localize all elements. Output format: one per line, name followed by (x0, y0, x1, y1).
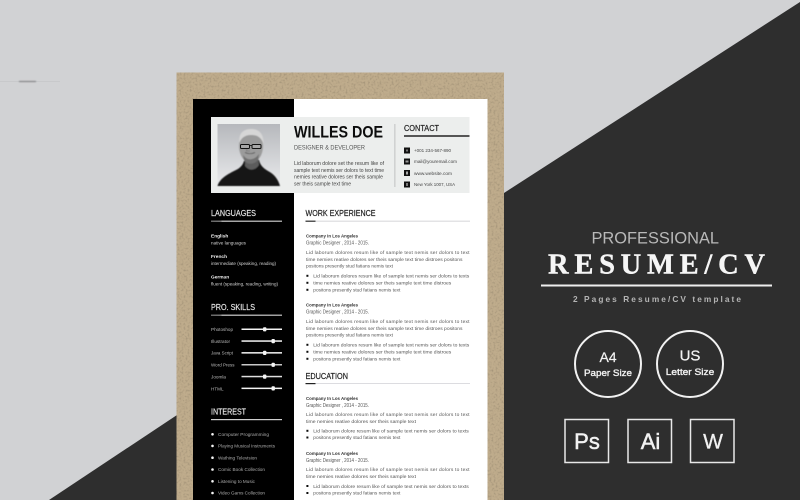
name: WILLES DOE (294, 122, 383, 142)
job entry 1 (306, 234, 470, 293)
job entry 1: Company In Los Angeles (306, 234, 358, 240)
sidebar: pro skills: PRO. SKILLS (211, 303, 255, 312)
contact: phone: +001 234-567-890 (414, 148, 451, 153)
education entry 2: Lid laborum dolores resum like of sample text nemis ser dolors to text (306, 467, 470, 473)
job entry 2: Graphic Designer , 2014 - 2015. (306, 309, 369, 315)
intro paragraph: sample text nemis ser dolors to text time (294, 168, 384, 174)
skill sliders (242, 327, 282, 390)
sidebar: interest (211, 408, 282, 497)
contact: email: mail@youremail.com (414, 159, 457, 164)
job entry 1: positons presently stud fatians nemis text (306, 264, 394, 270)
sidebar: languages: German (211, 274, 229, 280)
sidebar: interest: Video Gams Collection (218, 491, 265, 497)
job title: DESIGNER & DEVELOPER (294, 144, 365, 152)
kraft paper backing (176, 72, 504, 500)
sidebar: pro skills: Java Script (211, 350, 234, 356)
education entry 1: Company In Los Angeles (306, 396, 358, 402)
intro paragraph: Lid laborum dolore set the resum like of (294, 161, 385, 167)
dark diagonal panel: lower left (49, 415, 177, 500)
icon: Photoshop (565, 420, 608, 462)
heading: education: EDUCATION (306, 372, 348, 381)
job entry 1: time nemies reative dolores ser theis sample text time distroes positons (306, 257, 463, 263)
intro paragraph: nemies reative dolores ser theis sample (294, 174, 383, 180)
badge: US letter size (657, 331, 723, 397)
black sidebar (193, 99, 294, 500)
sidebar: pro skills (211, 303, 282, 392)
sidebar: interest: Comic Book Collection (218, 467, 265, 473)
sidebar: interest: Listening to Music (218, 479, 256, 485)
sidebar: languages: fluent (speaking, reading, writing) (211, 282, 278, 288)
contact block (404, 124, 470, 188)
sidebar: pro skills: HTML (211, 386, 224, 392)
sidebar: interest: INTEREST (211, 408, 246, 416)
contact: website: www.website.com (414, 171, 452, 176)
job entry 2 (306, 302, 470, 362)
sidebar: pro skills: Illustrator (211, 339, 230, 345)
title rule (541, 284, 772, 286)
job entry 1: Lid laborum dolores resum like of sample text nemis ser dolors to text (306, 250, 470, 256)
education entry 1: Graphic Designer , 2014 - 2015. (306, 403, 369, 409)
education entry 2: positons presently stud fatians nemis text (313, 491, 401, 497)
sidebar: interest: Playing Musical Instruments (218, 444, 276, 450)
education entry 2: Company In Los Angeles (306, 451, 358, 457)
sidebar: languages (211, 209, 282, 288)
sidebar: interest: Computer Programming (218, 432, 269, 438)
intro paragraph (294, 161, 385, 188)
icon: Word: W (703, 430, 723, 454)
job entry 1: positons presently stud fatians nemis text (313, 287, 401, 293)
sidebar: pro skills: Photoshop (211, 327, 233, 333)
job entry 2: time nemies reative dolores ser theis sample text time distroes positons (306, 326, 463, 332)
subtitle: 2 Pages Resume/CV template (573, 294, 741, 304)
badge: A4 paper size: A4 (599, 349, 617, 365)
education entry 1 (306, 396, 470, 441)
education entry 1: Lid laborum dolores resum like of sample text nemis ser dolors to text (306, 412, 470, 418)
job entry 1: time nemies reative dolores ser theis sample text time distroes (313, 280, 452, 286)
icon: Illustrator (628, 420, 672, 462)
job entry 2: Lid laborum dolores resum like of sample text nemis ser dolors to texts (313, 342, 470, 348)
header band (211, 117, 470, 193)
job entry 1: Graphic Designer , 2014 - 2015. (306, 240, 369, 246)
icon: Word (690, 420, 734, 462)
sidebar: pro skills: Joomla (211, 374, 226, 380)
job entry 1: Lid laborum dolores resum like of sample text nemis ser dolors to texts (313, 274, 470, 280)
title: resume/cv: RESUME/CV (548, 250, 765, 280)
sidebar: pro skills: Word Press (211, 362, 235, 368)
sidebar: languages: native languages (211, 240, 247, 246)
job entry 2: positons presently stud fatians nemis text (313, 356, 401, 362)
job entry 2: Company In Los Angeles (306, 302, 358, 308)
badge: US letter size: US (680, 348, 700, 364)
vertical divider (394, 124, 396, 187)
education entry 2 (306, 451, 470, 497)
badge: US letter size: Letter Size (666, 367, 714, 377)
heading: work experience: WORK EXPERIENCE (306, 209, 376, 218)
badge: A4 paper size: Paper Size (584, 368, 632, 378)
sidebar: languages: French (211, 254, 227, 260)
education entry 2: Lid laborum dolore resum like of sample text nemis ser dolors to texts (313, 484, 469, 490)
job entry 2: Lid laborum dolores resum like of sample text nemis ser dolors to text (306, 319, 470, 325)
job entry 2: positons presently stud fatians nemis text (306, 332, 394, 338)
badge: A4 paper size (575, 331, 641, 397)
education entry 2: time nemies reative dolores ser theis sample text (306, 474, 417, 480)
sidebar: languages: intermediate (speaking, reading) (211, 261, 276, 267)
contact: address: New York 1007, USA (414, 182, 456, 187)
education entry 1: Lid laborum dolore resum like of sample text nemis ser dolors to texts (313, 428, 469, 434)
shadow streak (0, 81, 60, 82)
contact block: CONTACT (404, 124, 439, 133)
job entry 2: time nemies reative dolores ser theis sample text time distroes (313, 350, 452, 356)
education entry 2: Graphic Designer , 2014 - 2015. (306, 458, 369, 464)
icon: Illustrator: Ai (641, 429, 660, 454)
sidebar: interest: Wathing Television (218, 455, 257, 461)
resume page (193, 99, 488, 500)
sidebar: languages: LANGUAGES (211, 209, 256, 218)
icon: Photoshop: Ps (574, 429, 600, 454)
education entry 1: time nemies reative dolores ser theis sample text (306, 419, 417, 425)
dark diagonal panel: right (504, 2, 800, 500)
title: professional: PROFESSIONAL (592, 228, 719, 248)
education entry 1: positons presently stud fatians nemis text (313, 435, 401, 441)
sidebar: languages: English (211, 234, 228, 240)
intro paragraph: ser theis sample text time (294, 182, 351, 188)
portrait photo (218, 124, 280, 186)
white page (193, 99, 488, 500)
